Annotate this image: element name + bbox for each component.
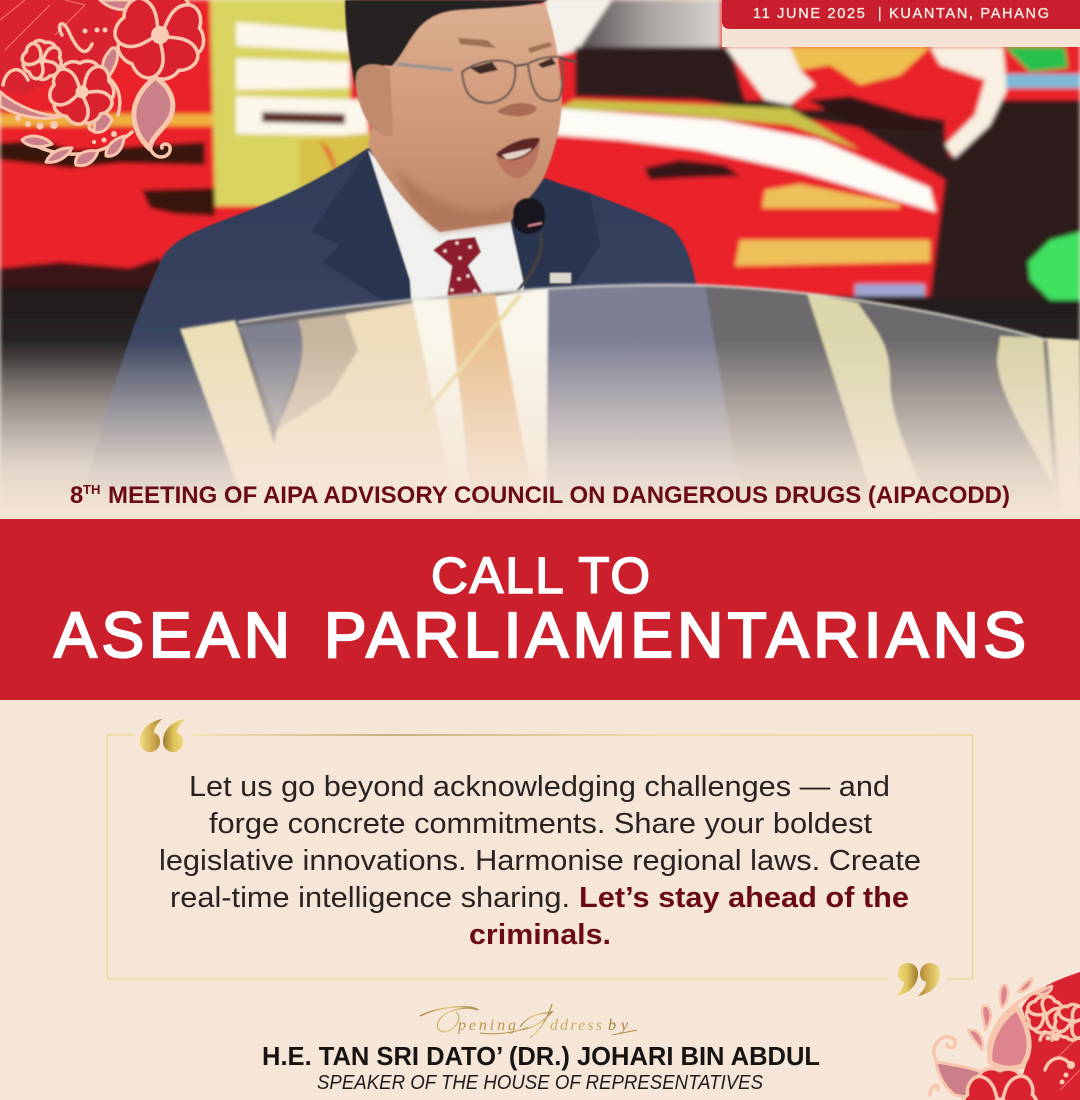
mouth: [496, 138, 540, 178]
quote text: legislative innovations. Harmonise regional laws. Create: [159, 845, 921, 877]
script label: [420, 1004, 637, 1038]
red title banner: [0, 519, 1080, 700]
teardrop leaf: [134, 77, 173, 149]
top pink leaf: [100, 0, 140, 10]
shirt through glass: [412, 298, 474, 520]
glass podium: [180, 285, 1080, 520]
subtitle: meeting name: 8: [70, 482, 83, 509]
floral ornament: top left: [0, 0, 214, 166]
floral ornament: bottom right: [930, 972, 1080, 1100]
quote text: real-time intelligence sharing.: [170, 882, 570, 914]
closing quotation mark: [896, 963, 940, 996]
opening quotation mark: [140, 719, 185, 752]
quote text: Let’s stay ahead of the: [579, 882, 909, 914]
gold frame: [108, 735, 972, 979]
brows, eyes and nose: [458, 38, 556, 116]
script label: ddress: [550, 1017, 602, 1034]
title: ASEAN: [54, 599, 290, 671]
quote text: Let us go beyond acknowledging challenges — and: [189, 771, 890, 803]
LED wall backdrop: [0, 0, 1080, 520]
hair: [345, 0, 548, 90]
glasses: [397, 57, 577, 103]
speaker name: H.E. TAN SRI DATO’ (DR.) JOHARI BIN ABDUL: [262, 1041, 820, 1071]
blue grey panels: [238, 320, 303, 428]
subtitle: meeting name: TH: [83, 482, 100, 497]
hibiscus flowers: [105, 0, 214, 91]
rim highlight: [238, 285, 1047, 340]
quote text: forge concrete commitments. Share your boldest: [209, 808, 872, 840]
fade to cream: [0, 340, 1080, 519]
title: [54, 547, 1026, 671]
cream centre panel: [260, 302, 470, 520]
quote text: [159, 771, 921, 951]
speaker role: SPEAKER OF THE HOUSE OF REPRESENTATIVES: [317, 1071, 763, 1094]
date and location tab: [722, 0, 1080, 47]
necktie: [433, 237, 485, 297]
right gold strips: [807, 293, 935, 520]
microphone: [513, 198, 545, 292]
title: CALL TO: [431, 547, 650, 604]
photo: speaker at the podium: [0, 0, 1080, 520]
beige curved band: [277, 314, 358, 430]
dots: [15, 28, 117, 144]
vines and curls: [3, 24, 170, 157]
face and neck: [368, 4, 562, 232]
suit: [85, 148, 740, 490]
lapel pin: [550, 273, 571, 283]
leaves: [968, 978, 1052, 1050]
teardrop leaf: [990, 1008, 1029, 1068]
tie through glass: [448, 294, 532, 490]
stamens: [1046, 1033, 1075, 1084]
speaker figure: [85, 0, 740, 490]
jacket lapels: [312, 150, 600, 320]
swoosh leaf: [936, 1062, 988, 1098]
hibiscus flowers: [959, 1069, 1041, 1100]
swoosh leaf: [0, 92, 62, 118]
script label: by: [608, 1017, 629, 1034]
microphone reflection: [410, 295, 520, 432]
title: PARLIAMENTARIANS: [324, 599, 1026, 671]
date and location tab: 11 JUNE 2025 | KUANTAN, PAHANG: [753, 6, 1049, 22]
left gold strip: [180, 320, 298, 520]
vines and curls: [930, 988, 1070, 1095]
jaw shadow: [395, 165, 515, 232]
shirt collar: [368, 150, 524, 310]
quote text: criminals.: [469, 919, 611, 951]
opening address byline: [262, 1004, 820, 1094]
subtitle: meeting name: MEETING OF AIPA ADVISORY COUNCIL ON DANGEROUS DRUGS (AIPACODD): [108, 482, 1010, 509]
script label: pening: [457, 1017, 516, 1034]
quote panel: [108, 719, 972, 996]
leaves: [22, 48, 124, 166]
ear: [356, 64, 393, 136]
